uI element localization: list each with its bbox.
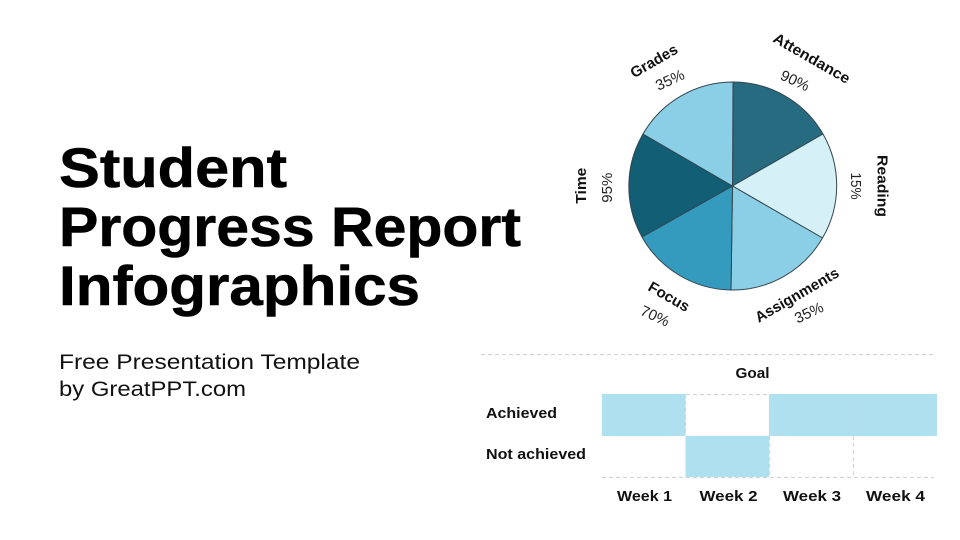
label: attendance 90%: 90% (778, 67, 812, 95)
label: focus 70% (638, 279, 692, 330)
label: time 95%: Time (573, 168, 590, 204)
row labels: Achieved (486, 406, 557, 422)
goal table: Not achieved (486, 447, 586, 463)
title: Student (59, 136, 287, 199)
goal table: Week 4 (866, 489, 925, 505)
label: grades 35% (627, 41, 687, 94)
grid lines (481, 354, 934, 478)
achieved cells (602, 394, 937, 477)
title: Infographics (59, 254, 420, 317)
label: focus 70%: Focus (645, 279, 692, 316)
label: reading 15%: Reading (874, 155, 891, 217)
goal heading: Goal (736, 366, 770, 382)
subtitle: Free Presentation Template (59, 351, 360, 374)
label: grades 35%: 35% (653, 66, 687, 94)
label: reading 15%: 15% (847, 172, 864, 200)
label: focus 70%: 70% (638, 302, 672, 330)
goal table: Week 3 (783, 489, 841, 505)
title (59, 136, 521, 317)
pie chart (629, 82, 837, 290)
slice: reading (732, 134, 837, 238)
label: grades 35%: Grades (627, 41, 681, 82)
subtitle (59, 351, 360, 401)
label: reading 15% (847, 155, 891, 217)
slice: grades (643, 82, 733, 186)
title: Progress Report (59, 195, 521, 258)
slice: time (629, 134, 732, 237)
slice: focus (642, 186, 732, 290)
label: time 95% (573, 168, 616, 204)
label: assignments 35%: Assignments (752, 265, 842, 326)
label: time 95%: 95% (599, 173, 616, 203)
slice: attendance (732, 82, 823, 186)
label: attendance 90%: Attendance (770, 30, 853, 88)
goal table: Week 2 (700, 489, 758, 505)
label: assignments 35%: 35% (792, 299, 826, 327)
week labels: Week 1 (617, 489, 672, 505)
subtitle: by GreatPPT.com (59, 378, 246, 401)
goal table (481, 354, 937, 505)
slice: assignments (731, 186, 822, 290)
